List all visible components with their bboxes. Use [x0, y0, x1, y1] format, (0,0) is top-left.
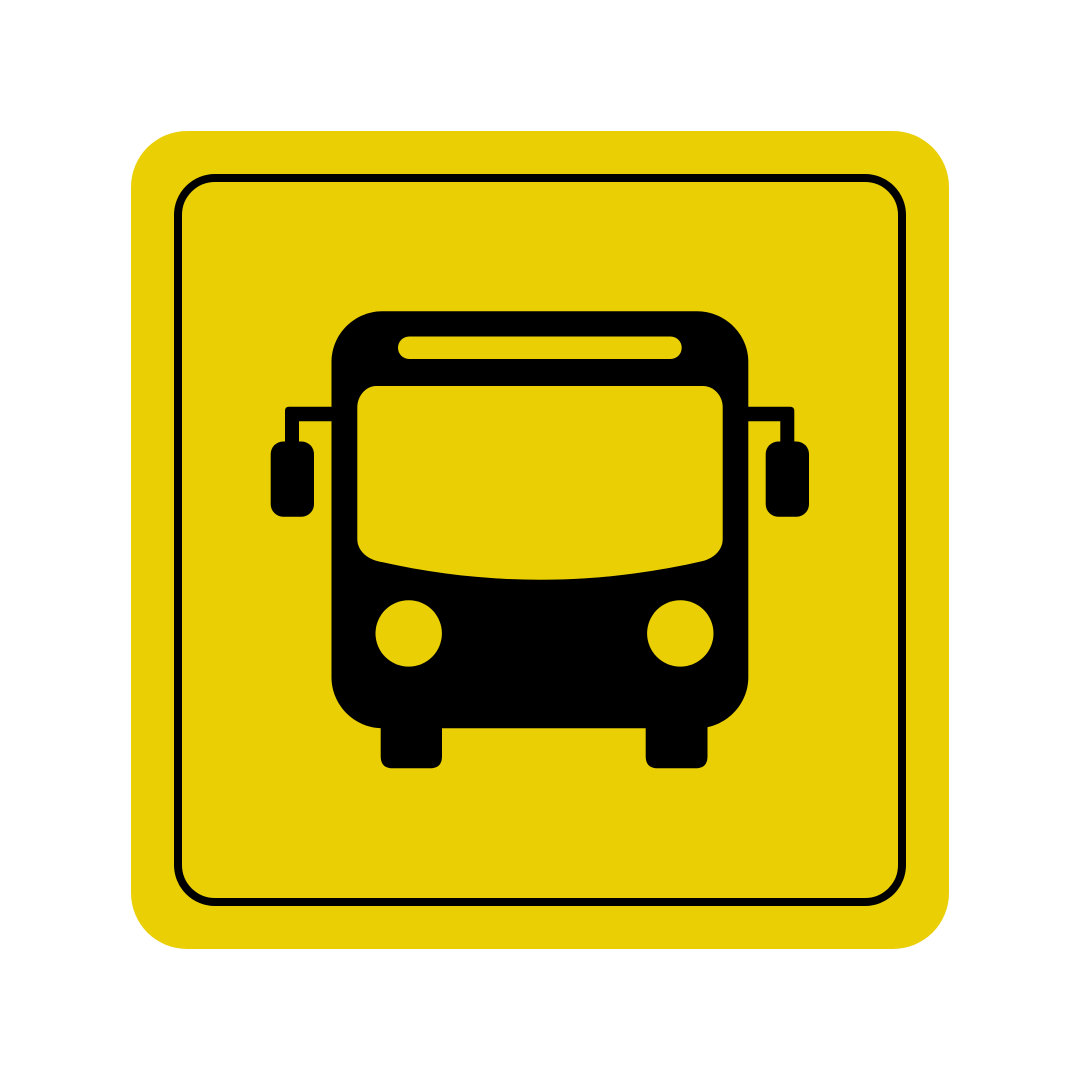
destination sign	[398, 336, 682, 359]
windshield	[357, 386, 723, 580]
left mirror	[271, 407, 332, 517]
right headlight	[647, 600, 714, 667]
right wheel	[646, 720, 708, 768]
right mirror	[748, 407, 809, 517]
bus body	[332, 311, 748, 728]
left wheel	[381, 720, 442, 768]
left headlight	[376, 600, 442, 667]
sign inner border	[178, 178, 902, 902]
icon: bus	[271, 311, 809, 768]
icon: yellow bus sign	[131, 131, 949, 949]
sign background	[131, 131, 949, 949]
